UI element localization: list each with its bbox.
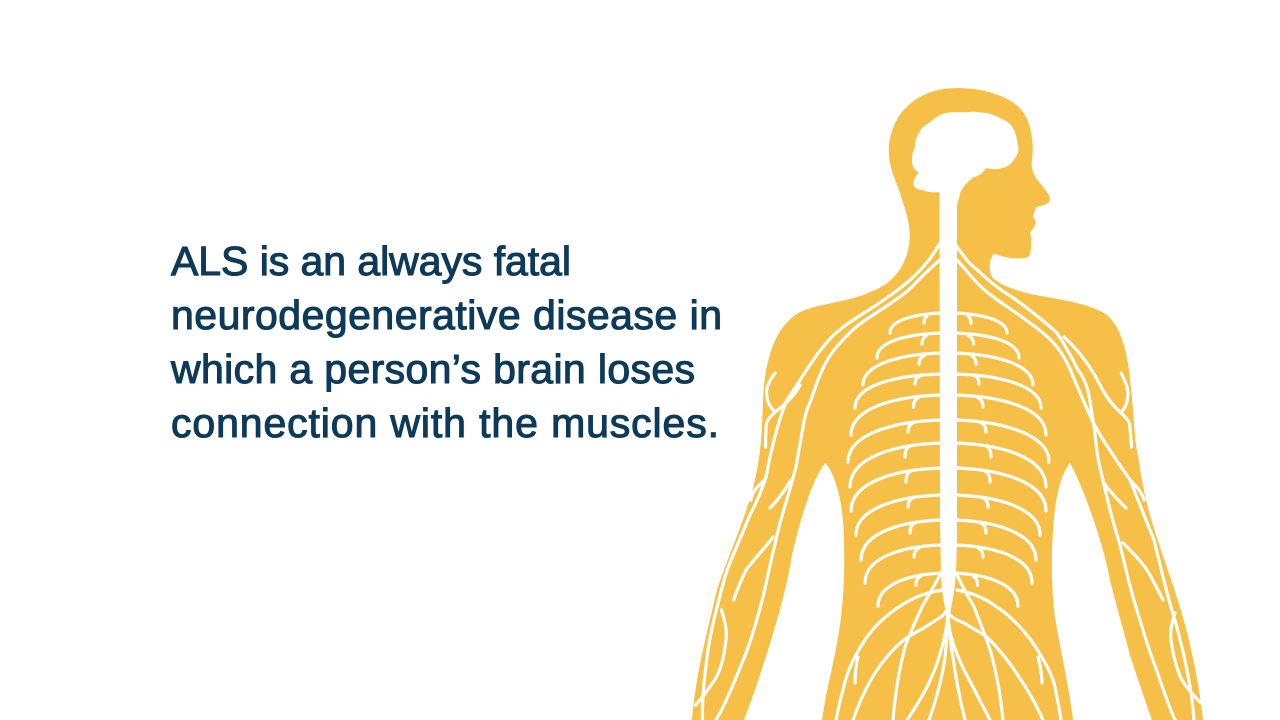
body silhouette — [692, 88, 1203, 720]
illustration: human body with nervous system — [692, 88, 1203, 720]
nerves: left shoulder and arm — [696, 243, 940, 720]
text block: ALS definition: connection with the muscles. — [171, 400, 719, 446]
ribs: left intercostal nerves — [848, 313, 948, 606]
text block: ALS definition: neurodegenerative disease in — [171, 292, 722, 338]
nerves: right shoulder and arm — [957, 247, 1201, 720]
text block: ALS definition: ALS is an always fatal — [171, 238, 571, 284]
text block: ALS definition — [170, 238, 722, 446]
ribs: right intercostal nerves — [948, 313, 1049, 606]
text block: ALS definition: which a person’s brain loses — [170, 346, 695, 392]
brain and spinal cord — [912, 112, 1018, 615]
nerves: lower trunk — [836, 575, 1061, 720]
